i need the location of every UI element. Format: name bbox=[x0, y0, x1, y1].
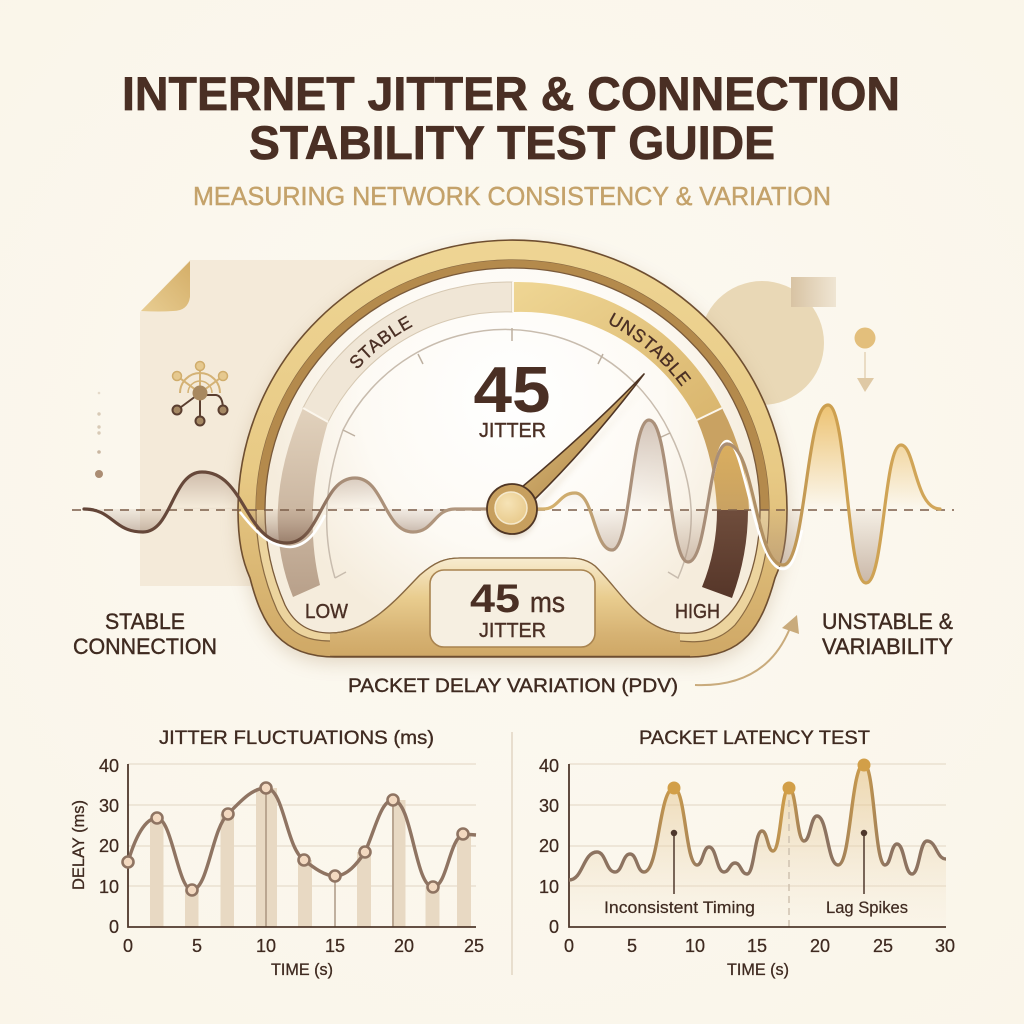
chart: jitter fluctuations bbox=[70, 727, 484, 979]
points bbox=[122, 782, 468, 896]
label stable: STABLE bbox=[350, 316, 413, 368]
band: low segment bbox=[278, 408, 328, 597]
x axis labels: 5 bbox=[627, 936, 637, 956]
y axis labels: 40 bbox=[539, 756, 559, 776]
title: INTERNET JITTER & CONNECTION bbox=[122, 67, 900, 120]
x axis labels: 20 bbox=[810, 936, 830, 956]
x axis labels: 25 bbox=[873, 936, 893, 956]
x axis labels: 15 bbox=[325, 936, 345, 956]
right label: UNSTABLE & bbox=[822, 609, 953, 634]
ticks bbox=[343, 328, 670, 438]
x axis labels: 25 bbox=[464, 936, 484, 956]
gauge inner ring bbox=[256, 260, 769, 642]
gauge bbox=[232, 238, 794, 670]
icon: network nodes bbox=[172, 362, 228, 426]
grid bbox=[569, 764, 946, 886]
band: unstable segment bbox=[514, 282, 722, 420]
x axis title: TIME (s) bbox=[727, 961, 789, 979]
bottom gold plate bbox=[330, 558, 680, 656]
marker dashed bbox=[788, 800, 790, 927]
subtitle: MEASURING NETWORK CONSISTENCY & VARIATION bbox=[193, 181, 831, 211]
icon: falling dot and arrow bbox=[854, 328, 876, 392]
reading label: JITTER bbox=[479, 420, 546, 442]
band dividers bbox=[303, 282, 722, 422]
band: amber segment bbox=[697, 408, 749, 511]
gauge face bbox=[265, 268, 760, 633]
grid bbox=[128, 764, 476, 886]
readout plate: JITTER bbox=[479, 620, 546, 642]
tick arc bbox=[327, 329, 691, 578]
y axis labels: 10 bbox=[539, 877, 559, 897]
chart title: JITTER FLUCTUATIONS (ms) bbox=[159, 727, 434, 749]
wave white highlight bbox=[240, 441, 802, 569]
dotted signal trail bbox=[95, 392, 103, 478]
paper card with folded corner bbox=[140, 260, 480, 586]
x axis title: TIME (s) bbox=[271, 961, 333, 979]
y axis title: DELAY (ms) bbox=[70, 800, 88, 890]
left label bbox=[73, 609, 217, 659]
y axis labels: 10 bbox=[99, 877, 119, 897]
left label: CONNECTION bbox=[73, 634, 217, 659]
readout plate: 45 bbox=[470, 577, 520, 621]
annotation leaders bbox=[672, 830, 866, 894]
axes bbox=[569, 764, 946, 927]
wave line bbox=[84, 405, 940, 583]
y axis labels: 30 bbox=[99, 796, 119, 816]
needle bbox=[487, 374, 647, 538]
x axis labels: 0 bbox=[564, 936, 574, 956]
x axis labels: 10 bbox=[685, 936, 705, 956]
band: stable segment bbox=[303, 282, 512, 422]
line bbox=[569, 764, 946, 880]
x axis labels: 0 bbox=[123, 936, 133, 956]
y axis labels: 30 bbox=[539, 796, 559, 816]
annotation inconsistent timing: Inconsistent Timing bbox=[604, 899, 755, 917]
right label: VARIABILITY bbox=[822, 634, 953, 659]
y axis labels: 0 bbox=[549, 917, 559, 937]
x axis labels: 5 bbox=[192, 936, 202, 956]
decorative circle and square bbox=[700, 277, 836, 405]
y axis labels: 0 bbox=[109, 917, 119, 937]
reading 45: 45 bbox=[474, 353, 550, 426]
chart title: PACKET LATENCY TEST bbox=[639, 727, 870, 749]
title bbox=[122, 67, 900, 169]
x axis labels: 10 bbox=[256, 936, 276, 956]
y axis labels: 20 bbox=[539, 836, 559, 856]
x axis labels bbox=[564, 936, 955, 956]
x axis labels: 20 bbox=[394, 936, 414, 956]
right label bbox=[822, 609, 953, 659]
jitter wave bbox=[72, 405, 954, 583]
label high: HIGH bbox=[675, 601, 720, 623]
chart: packet latency test bbox=[539, 727, 955, 979]
line bbox=[128, 788, 476, 890]
gauge gold rim bbox=[238, 240, 787, 657]
y axis labels bbox=[99, 756, 119, 937]
baseline dashed bbox=[72, 509, 954, 511]
divider bbox=[511, 732, 513, 975]
readout plate: ms bbox=[530, 587, 565, 619]
axes bbox=[128, 764, 476, 927]
readout plate bbox=[430, 570, 595, 647]
area bbox=[569, 764, 946, 927]
bar stems bbox=[266, 788, 393, 927]
wave fills bbox=[84, 405, 940, 583]
gauge shadow bbox=[238, 246, 787, 663]
y axis labels: 40 bbox=[99, 756, 119, 776]
y axis labels: 20 bbox=[99, 836, 119, 856]
left label: STABLE bbox=[105, 609, 185, 634]
label unstable: UNSTABLE bbox=[610, 312, 692, 386]
x axis labels: 30 bbox=[935, 936, 955, 956]
band: dark high segment bbox=[702, 510, 748, 598]
label low: LOW bbox=[305, 601, 348, 623]
annotation lag spikes: Lag Spikes bbox=[826, 899, 908, 917]
bars bbox=[150, 788, 471, 927]
gauge bronze crescent bbox=[256, 260, 769, 510]
title: STABILITY TEST GUIDE bbox=[249, 116, 775, 169]
y axis labels bbox=[539, 756, 559, 937]
arrow: pdv to unstable bbox=[695, 615, 799, 685]
peak dots bbox=[668, 758, 870, 794]
caption pdv: PACKET DELAY VARIATION (PDV) bbox=[348, 676, 678, 697]
x axis labels bbox=[123, 936, 484, 956]
x axis labels: 15 bbox=[747, 936, 767, 956]
